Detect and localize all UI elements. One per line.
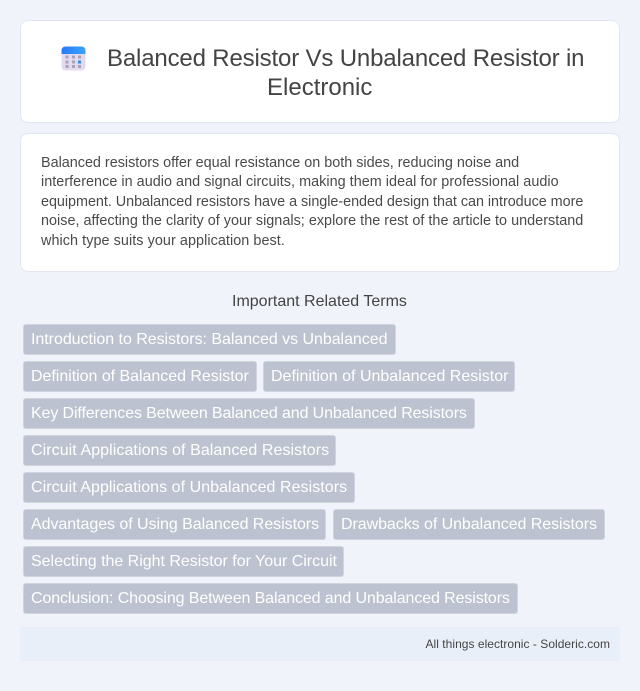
heading: important related terms: Important Related Terms: [232, 293, 407, 310]
chip: introduction: [23, 324, 396, 355]
footer credit: All things electronic - Solderic.com: [426, 637, 610, 651]
chip: advantages: [23, 509, 326, 540]
icon: calendar: [62, 46, 86, 70]
panel: title card: [20, 20, 620, 123]
text block: summary: which type suits your application best.: [41, 233, 285, 249]
chip: drawbacks: Drawbacks of Unbalanced Resistors: [341, 516, 597, 533]
text block: summary: equipment. Unbalanced resistors have a single-ended design that can introduce more: [41, 194, 583, 210]
chip: definition unbalanced: Definition of Unbalanced Resistor: [271, 368, 508, 385]
text block: summary: Balanced resistors offer equal resistance on both sides, reducing noise and: [41, 155, 519, 171]
chip: introduction: Introduction to Resistors: Balanced vs Unbalanced: [31, 331, 387, 348]
text block: summary: [41, 155, 583, 249]
chip: key differences: [23, 398, 475, 429]
heading: title line 1: Balanced Resistor Vs Unbalanced Resistor in: [107, 45, 584, 72]
chip: key differences: Key Differences Between Balanced and Unbalanced Resistors: [31, 405, 467, 422]
chip: definition balanced: [23, 361, 257, 392]
chip: applications unbalanced: [23, 472, 355, 503]
chip: definition balanced: Definition of Balanced Resistor: [31, 368, 249, 385]
footer bar: [20, 627, 620, 661]
chip: selecting: [23, 546, 344, 577]
chip: applications unbalanced: Circuit Applications of Unbalanced Resistors: [31, 479, 347, 496]
text block: summary: noise, affecting the clarity of your signals; explore the rest of the article to understand: [41, 213, 583, 229]
chip: applications balanced: Circuit Applications of Balanced Resistors: [31, 442, 329, 459]
chip: applications balanced: [23, 435, 336, 466]
chip: conclusion: [23, 583, 518, 614]
chip: definition unbalanced: [263, 361, 515, 392]
chip: drawbacks: [333, 509, 605, 540]
chip: selecting: Selecting the Right Resistor for Your Circuit: [31, 553, 337, 570]
heading: title line 2: Electronic: [267, 74, 372, 101]
panel: summary card: [20, 133, 620, 272]
chip: conclusion: Conclusion: Choosing Between Balanced and Unbalanced Resistors: [31, 590, 510, 607]
panel: related term chips: [23, 324, 605, 614]
chip: advantages: Advantages of Using Balanced Resistors: [31, 516, 319, 533]
text block: summary: interference in audio and signal circuits, making them ideal for professional audio: [41, 174, 559, 190]
